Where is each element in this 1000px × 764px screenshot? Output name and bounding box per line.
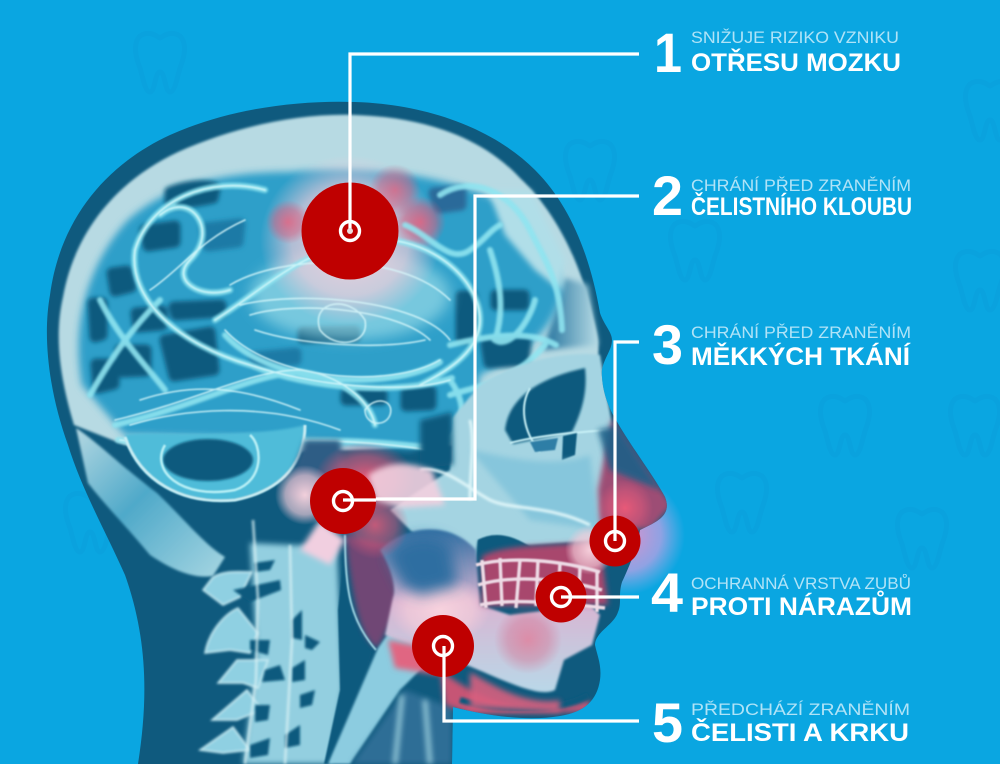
- orbit rims: [510, 388, 610, 452]
- throat strip: [327, 634, 421, 764]
- head x-ray illustration: [47, 102, 672, 764]
- marker 4: teeth: [536, 572, 587, 622]
- item 5 text: ČELISTI A KRKU: [691, 717, 909, 747]
- lower neck streaks: [395, 695, 430, 764]
- pink under skull at joint: [318, 444, 408, 510]
- cervical spine: [200, 520, 343, 764]
- item 5 text: 5: [652, 691, 683, 754]
- marker 2: jaw joint: [310, 468, 376, 534]
- notch below orbit: [530, 433, 577, 460]
- item 3 text: 3: [652, 313, 683, 376]
- nasal cavity: [477, 534, 529, 562]
- item 4 text: [651, 561, 912, 624]
- item 5 text: PŘEDCHÁZÍ ZRANĚNÍM: [691, 700, 910, 719]
- head silhouette: [47, 102, 667, 764]
- item 3 text: CHRÁNÍ PŘED ZRANĚNÍM: [691, 323, 911, 342]
- item 1 text: 1: [654, 21, 682, 84]
- facial bones: [390, 354, 613, 560]
- nasal bone strokes: [420, 420, 590, 525]
- orbit: [505, 368, 586, 444]
- marker 1: brain: [302, 180, 398, 280]
- item 4 text: PROTI NÁRAZŮM: [691, 589, 912, 621]
- brain base: [79, 170, 562, 450]
- x-ray contents: [59, 115, 672, 764]
- jaw pink areas: [397, 580, 484, 635]
- item 2 text: CHRÁNÍ PŘED ZRANĚNÍM: [691, 176, 911, 195]
- brain thin strokes: [115, 186, 480, 450]
- item 2 text: 2: [652, 164, 683, 227]
- line 3: [615, 342, 639, 541]
- item 2 text: [652, 164, 912, 227]
- faint tooth icons pattern: [65, 33, 1000, 568]
- dark brain folds: [93, 186, 526, 406]
- line 2: [343, 196, 639, 499]
- lower neck tissue: [352, 690, 452, 764]
- line 1: [350, 54, 639, 230]
- frontal sinus: [543, 278, 598, 350]
- skull: [59, 115, 599, 452]
- item 4 text: 4: [651, 561, 683, 624]
- glow around nose and lips: [565, 475, 685, 595]
- mandible: [380, 529, 600, 692]
- nose soft tissue: [598, 418, 672, 530]
- cerebellum: [125, 425, 305, 501]
- occipital crescent: [76, 428, 225, 577]
- pale frontal lobe: [488, 190, 565, 290]
- line 4: [561, 595, 639, 599]
- neck gap: [323, 565, 348, 764]
- item 5 text: [652, 691, 910, 754]
- cheek: [470, 450, 600, 530]
- dark area behind orbit: [420, 412, 453, 468]
- dark area beneath brain: [288, 436, 346, 491]
- jaw ramus thin line: [345, 535, 376, 650]
- brain halo strokes: [90, 186, 562, 448]
- spinous processes: [200, 572, 268, 753]
- item 3 text: [652, 313, 911, 376]
- pale centre of brain: [250, 250, 450, 340]
- item 1 text: OTŘESU MOZKU: [691, 47, 901, 77]
- marker 5: jaw and neck: [412, 615, 474, 677]
- chin dark outline: [460, 695, 588, 708]
- vertebral holes: [233, 560, 320, 758]
- vertical spine lines: [245, 520, 292, 764]
- item 1 text: [654, 21, 901, 84]
- marker 3: soft tissue: [590, 515, 640, 566]
- item 4 text: OCHRANNÁ VRSTVA ZUBŮ: [691, 574, 911, 593]
- item 1 text: SNIŽUJE RIZIKO VZNIKU: [691, 28, 899, 47]
- teeth grid: [476, 558, 605, 612]
- underchin tissue: [440, 670, 590, 714]
- item 3 text: MĚKKÝCH TKÁNÍ: [691, 341, 911, 371]
- connector lines: [343, 54, 639, 721]
- maxilla pink: [482, 540, 608, 606]
- item 2 text: ČELISTNÍHO KLOUBU: [691, 191, 912, 221]
- line 5: [444, 646, 639, 721]
- pink glow on brain: [260, 155, 440, 325]
